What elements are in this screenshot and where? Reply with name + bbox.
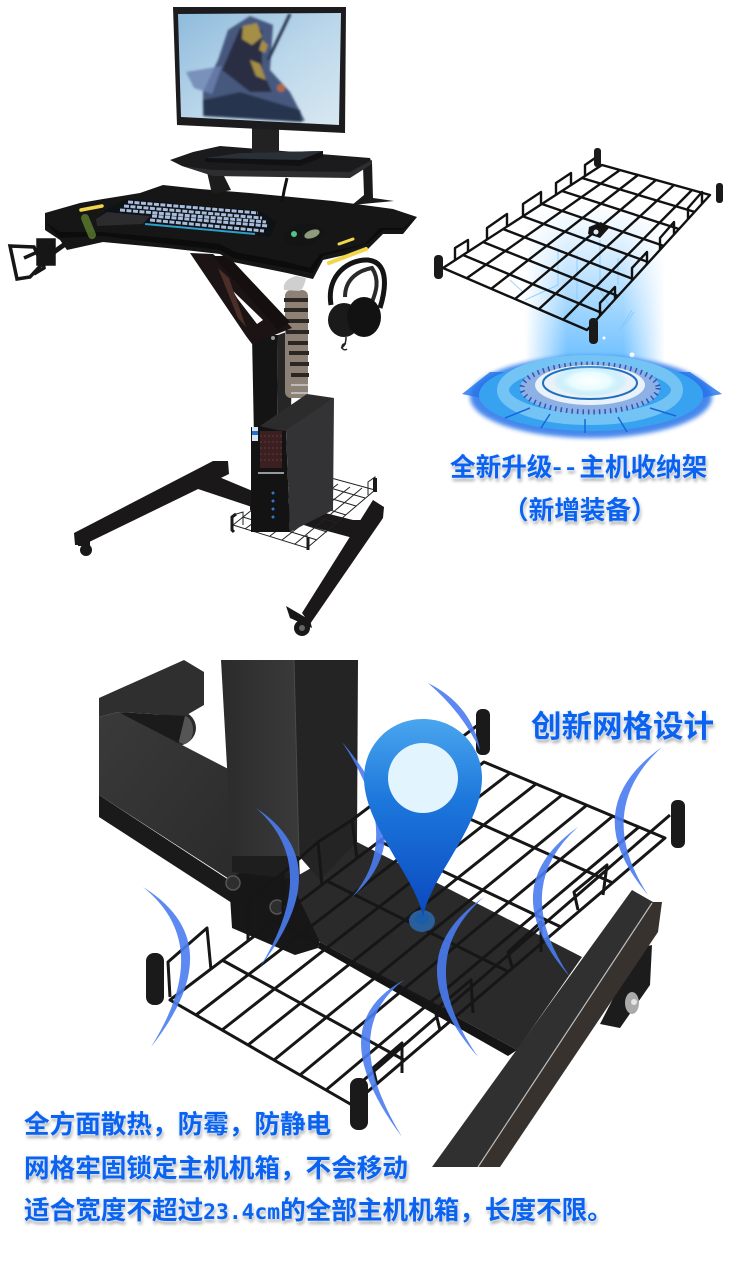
blue airflow arcs — [143, 683, 662, 1137]
text: upgrade subtitle: （新增装备） — [503, 490, 657, 527]
wire rack under the PC — [232, 470, 375, 550]
text: feature line two: 网格牢固锁定主机机箱，不会移动 — [24, 1148, 408, 1185]
casters — [78, 540, 312, 636]
rack corner posts — [146, 709, 685, 1130]
desk top — [45, 185, 417, 279]
panel: rack close-up photo — [99, 660, 685, 1167]
headphones on hook — [328, 260, 384, 350]
text: feature line three: 适合宽度不超过23.4cm的全部主机机箱，长度不限。 — [24, 1190, 613, 1227]
monitor — [173, 7, 346, 166]
bolts — [226, 876, 284, 914]
right caster — [600, 945, 652, 1028]
text: feature line one: 全方面散热，防霉，防静电 — [24, 1104, 331, 1141]
mouse — [282, 220, 326, 250]
panel: upgraded wire rack with hologram — [434, 148, 723, 438]
screen artwork — [186, 14, 305, 122]
hologram light beam — [510, 205, 665, 374]
text: upgrade title: 全新升级--主机收纳架 — [450, 447, 707, 484]
wire rack grid — [443, 156, 710, 330]
right base rail — [432, 890, 662, 1167]
rack side hoops — [168, 725, 670, 1105]
pc tower — [251, 394, 334, 532]
hologram disc — [462, 356, 722, 438]
base frame rear — [99, 660, 240, 905]
rack corner posts — [434, 148, 723, 344]
panel: gaming desk product photo — [10, 7, 417, 636]
text: innovative grid heading: 创新网格设计 — [531, 702, 714, 746]
rack mount plate — [588, 222, 609, 238]
center beam — [290, 842, 582, 1056]
caster behind frame — [156, 710, 196, 746]
location pin marker — [364, 719, 482, 932]
frame bracket — [229, 860, 330, 955]
close-up wire rack — [168, 725, 670, 1105]
rack side hoops — [455, 156, 702, 316]
keyboard — [96, 199, 277, 237]
led strips — [81, 206, 366, 263]
lift pole — [221, 660, 358, 880]
cup holder — [10, 240, 68, 279]
scissor arm — [190, 253, 292, 344]
monitor shelf — [170, 146, 394, 205]
cable sleeve — [284, 276, 309, 398]
lift column — [252, 330, 292, 438]
desk base frame — [74, 461, 384, 624]
